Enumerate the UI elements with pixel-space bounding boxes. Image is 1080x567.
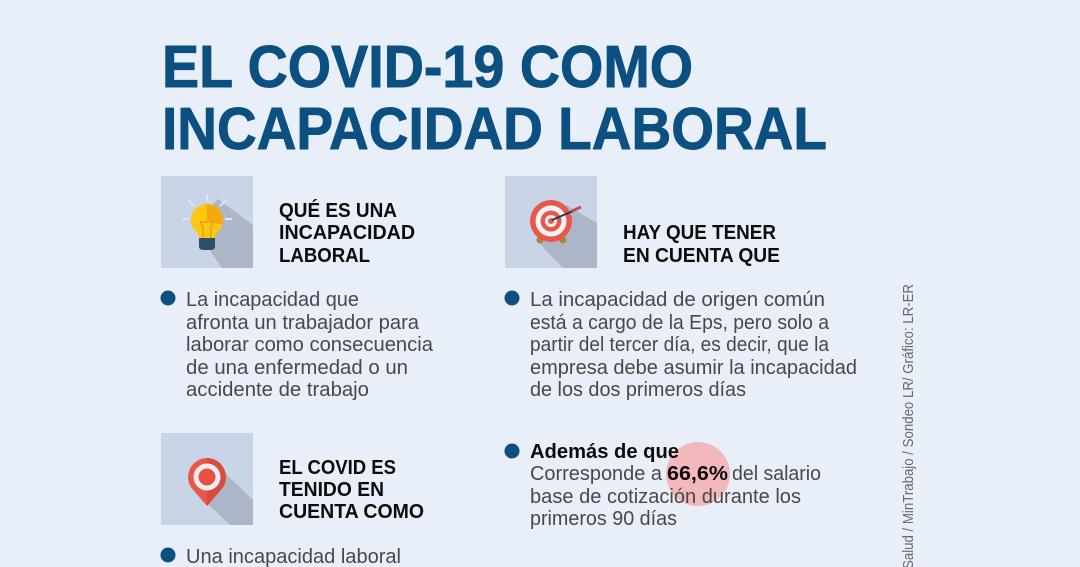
panel: el covid es tenido en cuenta como	[160, 433, 424, 567]
heading	[279, 199, 415, 267]
text block: primeros 90 días	[530, 508, 677, 530]
bullet	[160, 290, 176, 306]
panel: hay que tener en cuenta	[504, 176, 857, 401]
heading	[623, 221, 780, 267]
panel: además de que	[504, 441, 821, 530]
text block: partir del tercer día, es decir, que la	[530, 334, 830, 356]
text block: está a cargo de la Eps, pero solo a	[530, 312, 830, 334]
heading: LABORAL	[279, 244, 370, 267]
text block: de una enfermedad o un	[186, 357, 408, 379]
heading: INCAPACIDAD	[279, 221, 415, 244]
heading: CUENTA COMO	[279, 500, 424, 523]
text block: laborar como consecuencia	[186, 334, 434, 356]
title: INCAPACIDAD LABORAL	[162, 96, 827, 162]
text block: del salario	[732, 463, 821, 485]
icon: light bulb	[161, 176, 253, 268]
heading: EL COVID ES	[279, 456, 396, 479]
icon: location pin	[161, 433, 253, 525]
text block	[530, 289, 857, 401]
panel: qué es una incapacidad laboral	[160, 176, 434, 401]
text block: Además de que	[530, 441, 679, 463]
text block: La incapacidad de origen común	[530, 289, 825, 311]
bullet	[160, 548, 176, 562]
bullet	[504, 444, 520, 458]
icon: target	[505, 176, 597, 268]
bullet	[504, 290, 520, 306]
text block: base de cotización durante los	[530, 486, 801, 508]
text block: Corresponde a	[530, 463, 663, 485]
text block	[186, 289, 434, 401]
title	[162, 34, 827, 162]
heading: TENIDO EN	[279, 478, 384, 501]
source credit: Salud / MinTrabajo / Sondeo LR/ Gráfico: LR-ER	[900, 284, 917, 567]
highlight circle	[666, 442, 730, 506]
title: EL COVID-19 COMO	[162, 34, 693, 100]
text block: La incapacidad que	[186, 289, 359, 311]
text block: accidente de trabajo	[186, 379, 369, 401]
heading: EN CUENTA QUE	[623, 244, 780, 267]
text block: afronta un trabajador para	[186, 312, 420, 334]
text block	[530, 441, 821, 530]
text block: 66,6%	[667, 463, 728, 485]
heading: QUÉ ES UNA	[279, 199, 397, 222]
text block: empresa debe asumir la incapacidad	[530, 357, 857, 379]
heading	[279, 456, 424, 523]
heading: HAY QUE TENER	[623, 221, 776, 244]
text block: de los dos primeros días	[530, 379, 746, 401]
